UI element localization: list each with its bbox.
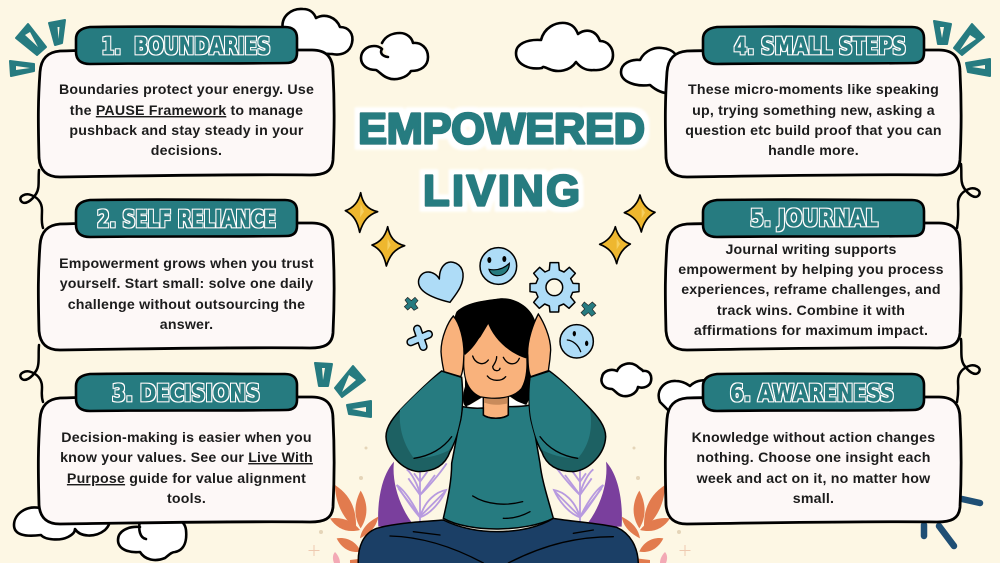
heading text: 4. SMALL STEPS [734, 34, 906, 60]
body text: challenge without outsourcing the [68, 297, 305, 313]
connector: right middle [957, 339, 980, 402]
icon: heart [419, 262, 463, 302]
decorative dots and pluses [308, 446, 690, 563]
body text: decisions. [151, 143, 222, 159]
back hair [454, 298, 537, 407]
cloud: behind awareness [659, 380, 710, 410]
right hand [528, 314, 551, 377]
body text: affirmations for maximum impact. [694, 323, 928, 339]
body text: experiences, reframe challenges, and [681, 282, 941, 298]
heading text: 2. SELF RELIANCE [97, 207, 276, 233]
accent rays: top left [10, 20, 65, 76]
cloud: top centre right [516, 23, 613, 71]
cloud: mid right [601, 364, 651, 396]
card [38, 397, 334, 524]
torso [443, 405, 553, 529]
left arm [386, 371, 463, 472]
accent rays: by decisions [315, 363, 371, 417]
body text: Purpose guide for value alignment [67, 471, 306, 487]
heading text: 1. BOUNDARIES [102, 34, 270, 60]
header [76, 27, 297, 64]
icon: gear [530, 263, 579, 312]
right arm [529, 371, 606, 472]
panel: awareness [665, 374, 961, 524]
header [703, 200, 924, 237]
illustration: meditating person with icons [330, 193, 670, 563]
connector: left upper [20, 170, 43, 228]
card [38, 223, 334, 350]
left hand [441, 316, 464, 377]
body text: handle more. [768, 143, 859, 159]
cloud: top centre left [361, 33, 428, 79]
heading text: 6. AWARENESS [730, 381, 894, 407]
front hair [455, 298, 536, 358]
sparkles [345, 193, 655, 266]
header [76, 200, 297, 237]
icon: smiling face [480, 248, 517, 284]
cloud: lower left second [118, 520, 186, 560]
accent rays: bottom right navy [924, 499, 980, 546]
body text: Knowledge without action changes [692, 430, 935, 446]
body text: nothing. Choose one insight each [696, 450, 931, 466]
legs [358, 518, 638, 563]
plants: left [330, 462, 447, 563]
header [703, 374, 924, 411]
body text: up, trying something new, asking a [692, 103, 935, 119]
body text: know your values. See our Live With [60, 450, 313, 466]
icon: teal cross right [581, 302, 596, 316]
header [76, 374, 297, 411]
header [703, 27, 924, 64]
neck [483, 393, 508, 418]
heading text: 3. DECISIONS [112, 381, 260, 407]
cloud: top left behind boundaries [283, 9, 352, 55]
panel: decisions [38, 374, 334, 524]
body text: question etc build proof that you can [685, 123, 942, 139]
face [464, 320, 527, 398]
body text: week and act on it, no matter how [696, 471, 931, 487]
title: EMPOWERED [358, 106, 645, 154]
connector: left middle [20, 345, 43, 402]
body text: small. [793, 491, 834, 507]
card [665, 397, 961, 524]
body text: These micro-moments like speaking [688, 82, 939, 98]
cloud: lower left pair [14, 507, 110, 539]
body text: empowerment by helping you process [678, 262, 944, 278]
body text: the PAUSE Framework to manage [70, 103, 303, 119]
facial features [473, 356, 519, 380]
connector: right upper [957, 164, 980, 228]
title: LIVING [423, 168, 580, 216]
body text: tools. [167, 491, 206, 507]
cloud: top right behind small steps [621, 48, 680, 94]
accent rays: top right [934, 21, 990, 76]
body text: yourself. Start small: solve one daily [60, 276, 313, 292]
body text: Journal writing supports [725, 242, 897, 258]
panel: boundaries [38, 27, 334, 177]
card [38, 50, 334, 177]
panel: journal [665, 200, 961, 350]
body text: Decision-making is easier when you [61, 430, 312, 446]
plants: right [553, 462, 670, 563]
icon: blue cross [411, 329, 429, 347]
body text: answer. [160, 317, 213, 333]
body text: track wins. Combine it with [717, 303, 905, 319]
icon: sad face [560, 325, 593, 358]
heading text: 5. JOURNAL [750, 206, 878, 232]
body text: Boundaries protect your energy. Use [59, 82, 314, 98]
card [665, 223, 961, 350]
icon: teal cross left [404, 297, 418, 310]
panel: self reliance [38, 200, 334, 350]
person [358, 298, 638, 563]
panel: small steps [665, 27, 961, 177]
card [665, 50, 961, 177]
title [358, 106, 645, 216]
body text: pushback and stay steady in your [69, 123, 304, 139]
body text: Empowerment grows when you trust [59, 256, 314, 272]
